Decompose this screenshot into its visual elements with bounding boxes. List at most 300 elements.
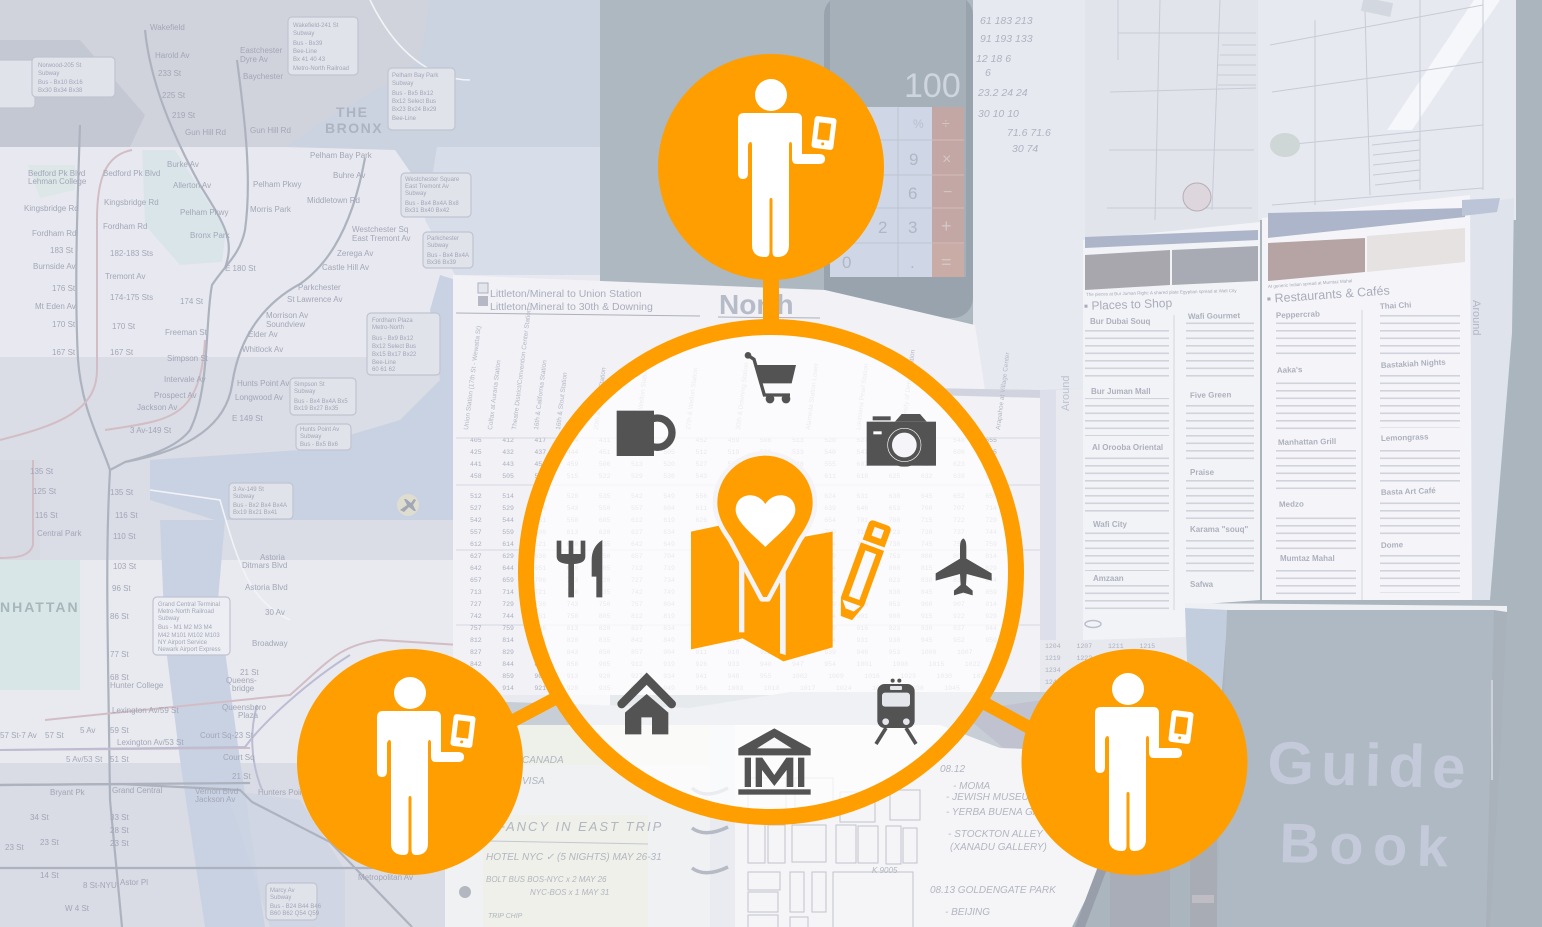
map labels: Bronx: Burnside Av <box>33 262 76 271</box>
icon: fork and knife <box>557 540 602 597</box>
icon: pencil <box>835 519 893 622</box>
panel: open guide book pages: ▪ Restaurants & Cafés <box>1266 283 1390 306</box>
station info cards: Metro-North Railroad <box>293 66 349 72</box>
panel: travel notebook: HOTEL NYC ✓ (5 NIGHTS) MAY 26-31 <box>486 852 662 863</box>
station info cards: Bx23 Bx24 Bx29 <box>392 107 437 113</box>
panel: handwritten sums sheet <box>973 0 1085 390</box>
panel: open guide book pages: Peppercrab <box>1276 309 1320 320</box>
panel: travel notebook: FANCY IN EAST TRIP <box>497 819 663 834</box>
map labels: Bronx: Elder Av <box>248 330 278 339</box>
panel: subway map <box>0 0 610 927</box>
panel: travel notebook: NYC-BOS x 1 MAY 31 <box>530 888 609 897</box>
map labels: Manhattan and Queens: Broadway <box>252 639 288 648</box>
map labels: Manhattan and Queens: 5 Av/53 St <box>66 755 103 764</box>
icon: coffee mug <box>617 411 672 456</box>
panel: handwritten sums sheet: 23.2 24 24 <box>977 87 1028 99</box>
station info cards: Bee-Line <box>372 360 397 366</box>
map labels: Bronx: Buhre Av <box>333 171 365 180</box>
icon: house <box>622 679 672 734</box>
panel: phone area: 3 <box>908 218 917 237</box>
connector: right person to ring <box>984 703 1032 729</box>
map labels: Manhattan and Queens: 125 St <box>33 487 57 496</box>
station info cards: Fordham Plaza <box>372 318 413 324</box>
station info cards: Bus - M1 M2 M3 M4 <box>158 625 213 631</box>
map labels: Manhattan and Queens: 14 St <box>40 871 59 880</box>
map labels: Manhattan and Queens: Ditmars Blvd <box>242 561 287 570</box>
panel: timetable sheet: 1204 1207 1211 1215 <box>1045 643 1155 650</box>
panel: timetable sheet: 542 544 551 558 605 612 619 626 633 640 647 654 701 708 715 722 729 <box>470 517 997 524</box>
panel: timetable sheet: 727 729 736 743 750 757 804 811 818 825 832 839 846 853 900 907 914 <box>470 601 997 608</box>
map labels: Manhattan and Queens: Grand Central <box>112 786 162 795</box>
map labels: Bronx: Pelham Pkwy <box>253 180 301 189</box>
panel: open guide book pages: Around <box>1470 300 1482 335</box>
panel: timetable sheet: 557 559 606 613 620 627 634 641 648 655 702 709 716 723 730 737 744 <box>470 529 997 536</box>
panel: travel notebook: BOLT BUS BOS-NYC x 2 MAY 26 <box>486 875 607 884</box>
station info cards: Bus - Bx4 Bx4A <box>427 253 469 259</box>
map labels: Bronx: Dyre Av <box>240 55 268 64</box>
panel: travel notebook <box>445 692 1185 927</box>
map labels: Manhattan and Queens: 57 St-7 Av <box>0 731 37 740</box>
station info cards: Bx12 Select Bus <box>392 99 436 105</box>
panel: timetable sheet: Littleton/Mineral to Union Station <box>490 288 642 300</box>
panel: phone area: . <box>910 253 915 272</box>
map labels: Bronx: Tremont Av <box>105 272 145 281</box>
connector: left person to ring <box>505 698 556 725</box>
map labels: Bronx: Intervale Av <box>164 375 206 384</box>
panel: open guide book pages: Basta Art Café <box>1381 486 1436 497</box>
map labels: Manhattan and Queens: 33 St <box>110 813 129 822</box>
panel: guide book cover <box>1110 603 1507 927</box>
station info cards: 60 61 62 <box>372 367 396 373</box>
station info cards: Bx19 Bx21 Bx41 <box>233 510 278 516</box>
panel: timetable sheet: 1249 1252 1256 1300 <box>1045 679 1155 686</box>
panel: timetable sheet: 642 644 651 658 705 712 719 726 733 740 747 754 801 808 815 822 829 <box>470 565 997 572</box>
map labels: Bronx: Bedford Pk Blvd <box>103 169 160 178</box>
panel: timetable sheet: 1234 1237 1241 1245 <box>1045 667 1155 674</box>
panel: phone area: + <box>941 216 952 236</box>
central icon set <box>557 352 992 795</box>
map labels: Bronx: 176 St <box>52 284 76 293</box>
map labels: Manhattan and Queens: Bryant Pk <box>50 788 86 797</box>
panel: timetable sheet: 441 443 452 459 506 513 520 527 534 541 548 555 602 609 616 623 630 <box>470 461 997 468</box>
map labels: Bronx: Morris Park <box>250 205 292 214</box>
map labels: Bronx: Kingsbridge Rd <box>24 204 79 213</box>
panel: phone area: × <box>942 151 951 168</box>
station info cards: Bx36 Bx39 <box>427 260 457 266</box>
map labels: Bronx: 167 St <box>110 348 134 357</box>
panel: timetable sheet: Arapahoe at Village Center <box>995 351 1012 430</box>
map labels: Bronx: Whitlock Av <box>242 345 283 354</box>
panel: hand-drawn calendar pages <box>1085 0 1516 240</box>
map labels: Bronx: Fordham Rd <box>103 222 147 231</box>
panel: open guide book pages: Bastakiah Nights <box>1381 358 1446 370</box>
panel: handwritten sums sheet: 30 10 10 <box>978 108 1019 120</box>
map heading: Manhattan: NHATTAN <box>0 599 80 615</box>
map labels: Manhattan and Queens: 30 Av <box>265 608 285 617</box>
panel: open guide book pages: Safwa <box>1190 580 1214 589</box>
icon: folded map with heart pin <box>691 453 833 661</box>
panel: handwritten sums sheet: 71.6 71.6 <box>1007 127 1051 139</box>
panel: open guide book pages: Bur Juman Mall <box>1091 387 1151 396</box>
circle: left traveller <box>297 649 523 875</box>
panel: timetable sheet: 742 744 751 758 805 812 819 826 833 840 847 854 901 908 915 922 929 <box>470 613 997 620</box>
station info cards: Subway <box>405 191 426 197</box>
main ring <box>526 327 1016 817</box>
map labels: Bronx: 219 St <box>172 111 196 120</box>
station info cards: Bus - Bx9 Bx12 <box>372 336 414 342</box>
panel: timetable sheet: Union Station (17th St - Wewatta St) <box>463 326 483 430</box>
station info cards: Bus - Bx2 Bx4 Bx4A <box>233 503 287 509</box>
map labels: Bronx: 174 St <box>180 297 204 306</box>
panel: travel notebook: - BEIJING <box>945 907 990 918</box>
station info cards: Bx 41 40 43 <box>293 57 326 63</box>
icon: airport marker <box>397 494 419 516</box>
panel: open guide book pages: Bur Dubai Souq <box>1090 317 1151 326</box>
panel: timetable sheet: Littleton/Mineral to 30th & Downing <box>490 301 653 313</box>
panel: handwritten sums sheet: 30 74 <box>1012 143 1038 155</box>
map labels: Bronx: 182-183 Sts <box>110 249 153 258</box>
panel: timetable sheet: 512 514 521 528 535 542 549 556 603 610 617 624 631 638 645 652 659 <box>470 493 997 500</box>
map labels: Bronx: Zerega Av <box>337 249 373 258</box>
map labels: Bronx: Hunts Point Av <box>237 379 289 388</box>
map labels: Bronx: Longwood Av <box>235 393 283 402</box>
station info cards: Grand Central Terminal <box>158 602 220 608</box>
station info cards: Bee-Line <box>293 49 318 55</box>
panel: phone area <box>600 0 985 320</box>
map labels: Bronx: Gun Hill Rd <box>250 126 291 135</box>
panel: open guide book pages: Wafi Gourmet <box>1188 311 1241 321</box>
panel: open guide book pages: Praise <box>1190 468 1215 477</box>
panel: timetable sheet: Colfax at Auraria Station <box>487 359 503 430</box>
panel: timetable sheet: 612 614 621 628 635 642 649 656 703 710 717 724 731 738 745 752 759 <box>470 541 997 548</box>
map labels: Bronx: Gun Hill Rd <box>185 128 226 137</box>
station info cards: Marcy Av <box>270 888 295 894</box>
map labels: Manhattan and Queens: Lexington Av/59 St <box>112 706 179 715</box>
station info cards: Bus - Bx4 Bx4A Bx5 <box>294 399 348 405</box>
panel: timetable sheet: 657 659 706 713 720 727 734 741 748 755 802 809 816 823 830 837 844 <box>470 577 997 584</box>
map labels: Manhattan and Queens: 68 St <box>110 673 129 682</box>
circle: right traveller <box>1022 649 1248 875</box>
map labels: Manhattan and Queens: Hunter College <box>110 681 164 690</box>
map labels: Bronx: St Lawrence Av <box>287 295 342 304</box>
panel: timetable sheet: 627 629 636 643 650 657 704 711 718 725 732 739 746 753 800 807 814 <box>470 553 997 560</box>
panel: travel notebook: (XANADU GALLERY) <box>950 842 1047 853</box>
panel: open guide book pages: Manhattan Grill <box>1278 437 1336 447</box>
station info cards: Bus - B24 B44 B46 <box>270 904 322 910</box>
icon: shopping cart <box>745 352 796 403</box>
map labels: Bronx: 3 Av-149 St <box>130 426 172 435</box>
panel: open guide book pages <box>1040 195 1514 640</box>
map labels: Manhattan and Queens: 21 St <box>232 772 251 781</box>
icon: person holding phone <box>1095 673 1194 851</box>
map labels: Bronx: Lehman College <box>28 177 87 186</box>
station info cards: Subway <box>300 434 321 440</box>
panel: open guide book pages: Al Orooba Oriental <box>1092 443 1163 452</box>
station info cards: Bx30 Bx34 Bx38 <box>38 88 83 94</box>
panel: timetable sheet: North <box>719 289 794 320</box>
station info cards: Bx12 Select Bus <box>372 344 416 350</box>
map labels: Bronx: Burke Av <box>167 160 199 169</box>
map labels: Manhattan and Queens: Lexington Av/53 St <box>117 738 184 747</box>
panel: timetable sheet: 812 814 821 828 835 842 849 856 903 910 917 924 931 938 945 952 959 <box>470 637 997 644</box>
map labels: Manhattan and Queens: Queens- <box>226 676 257 685</box>
panel: timetable sheet: 842 844 851 858 905 912 919 926 933 940 947 954 1001 1008 1015 1022 <box>470 661 980 668</box>
station info cards: Subway <box>233 494 254 500</box>
icon: person holding phone <box>738 79 837 257</box>
panel: open guide book pages: Around <box>1060 376 1072 411</box>
panel: timetable sheet: 30th & Downing Station <box>735 362 750 430</box>
panel: timetable sheet: 757 759 806 813 820 827 834 841 848 855 902 909 916 923 930 937 944 <box>470 625 997 632</box>
map labels: Manhattan and Queens: Central Park <box>37 529 82 538</box>
map labels: Manhattan and Queens: Astor Pl <box>120 878 148 887</box>
panel: timetable sheet: 527 529 536 543 550 557 604 611 618 625 632 639 646 653 700 707 714 <box>470 505 997 512</box>
panel: travel notebook: - STOCKTON ALLEY <box>948 829 1044 840</box>
map labels: Bronx: East Tremont Av <box>352 234 411 243</box>
panel: phone area: 100 <box>904 67 961 105</box>
panel: handwritten sums sheet: 61 183 213 <box>980 15 1033 27</box>
map labels: Bronx: Kingsbridge Rd <box>104 198 159 207</box>
map labels: Manhattan and Queens: 96 St <box>112 584 131 593</box>
panel: travel notebook: 08.12 <box>940 764 965 775</box>
map labels: Manhattan and Queens: 77 St <box>110 650 129 659</box>
panel: phone area: ÷ <box>942 115 950 131</box>
station info cards <box>0 17 473 920</box>
icon: airplane <box>936 538 992 595</box>
station info cards: B60 B62 Q54 Q59 <box>270 911 320 917</box>
panel: open guide book pages: Medzo <box>1279 500 1304 509</box>
station info cards: Bus - Bx39 <box>293 41 323 47</box>
panel: open guide book pages: Thai Chi <box>1380 300 1412 311</box>
panel: travel notebook: VISA <box>522 776 545 787</box>
map labels: Manhattan and Queens: 110 St <box>113 532 136 541</box>
map labels: Bronx: Pelham Bay Park <box>310 151 373 160</box>
icon: museum building <box>738 728 811 795</box>
station info cards: Subway <box>392 81 413 87</box>
map labels: Manhattan and Queens: 8 St-NYU <box>83 881 117 890</box>
panel: timetable sheet: 16th & Stout Station <box>555 372 569 430</box>
map labels: Bronx: Morrison Av <box>266 311 308 320</box>
station info cards: NY Airport Service <box>158 640 208 646</box>
panel: travel notebook: CANADA <box>522 755 564 766</box>
map labels: Bronx: Prospect Av <box>154 391 197 400</box>
panel: phone area: − <box>943 184 952 201</box>
map labels: Bronx: E 180 St <box>225 264 256 273</box>
icon: train <box>876 679 916 744</box>
panel: handwritten sums sheet: 91 193 133 <box>980 33 1033 45</box>
panel: travel notebook: K 9005 <box>872 866 898 875</box>
connector: top person to ring <box>763 270 779 330</box>
panel: phone area: 2 <box>878 218 887 237</box>
panel: handwritten sums sheet: 6 <box>985 67 991 79</box>
panel: travel notebook: - YERBA BUENA GARDENS <box>946 807 1075 818</box>
station info cards: 3 Av-149 St <box>233 487 264 493</box>
panel: timetable sheet: 25th & Welton Station <box>635 367 650 430</box>
station info cards: Bx19 Bx27 Bx35 <box>294 406 339 412</box>
panel: phone area: 0 <box>842 253 851 272</box>
map labels: Manhattan and Queens: Plaza <box>238 711 259 720</box>
map labels: Manhattan and Queens: 23 St <box>5 843 24 852</box>
panel: timetable sheet: 713 714 721 728 735 742 749 756 803 810 817 824 831 838 845 852 859 <box>470 589 997 596</box>
map labels: Manhattan and Queens: Vernon Blvd <box>195 787 238 796</box>
map labels: Manhattan and Queens: 34 St <box>30 813 49 822</box>
circle: top traveller <box>658 54 884 280</box>
map labels: Bronx: Castle Hill Av <box>322 263 369 272</box>
map labels: Manhattan and Queens: 51 St <box>110 755 129 764</box>
map labels: Bronx: Westchester Sq <box>352 225 408 234</box>
map labels: Bronx: Fordham Rd <box>32 229 76 238</box>
panel: phone area: 6 <box>908 184 917 203</box>
panel: open guide book pages: Lemongrass <box>1381 432 1429 443</box>
panel: open guide book pages: Amzaan <box>1093 574 1124 583</box>
station info cards: Metro-North Railroad <box>158 609 214 615</box>
panel: timetable sheet: 458 505 508 515 522 529 536 543 550 557 604 611 618 625 632 639 646 <box>470 473 997 480</box>
station info cards: Bus - Bx5 Bx12 <box>392 91 434 97</box>
map labels: Bronx: 170 St <box>52 320 76 329</box>
station info cards: Westchester Square <box>405 177 460 183</box>
map labels: Manhattan and Queens: 135 St <box>110 488 134 497</box>
panel: timetable sheet: Theatre District/Convention Center Station <box>511 308 533 430</box>
map labels: Manhattan and Queens: Hunters Point <box>258 788 307 797</box>
panel: timetable sheet: 827 829 836 843 850 857 904 911 918 925 932 939 946 953 1000 1007 <box>470 649 973 656</box>
map labels: Bronx: E 149 St <box>232 414 263 423</box>
panel: open guide book pages: Dome <box>1381 540 1404 550</box>
station info cards: Bus - Bx10 Bx16 <box>38 80 83 86</box>
map labels: Bronx: 183 St <box>50 246 74 255</box>
panel: timetable sheet <box>453 275 1190 695</box>
station info cards: Subway <box>38 71 59 77</box>
station info cards: Newark Airport Express <box>158 647 221 653</box>
map labels: Bronx: 170 St <box>112 322 136 331</box>
station info cards: Subway <box>294 389 315 395</box>
panel: timetable sheet: University of Denver Station <box>900 349 917 430</box>
station info cards: Subway <box>427 243 448 249</box>
map labels: Bronx: 167 St <box>52 348 76 357</box>
map labels: Bronx: Bronx Park <box>190 231 231 240</box>
map labels: Manhattan and Queens: 57 St <box>45 731 64 740</box>
map labels: Manhattan and Queens: 5 Av <box>80 726 95 735</box>
map labels: Manhattan and Queens: 21 St <box>240 668 259 677</box>
station info cards: Bus - Bx4 Bx4A Bx8 <box>405 201 459 207</box>
panel: timetable sheet: 1219 1222 1226 1230 <box>1045 655 1155 662</box>
map labels: Manhattan and Queens: 59 St <box>110 726 129 735</box>
icon: camera <box>867 414 936 466</box>
map heading: The Bronx: BRONX <box>325 120 383 136</box>
map heading: The Bronx <box>325 104 383 136</box>
map labels: Bronx: Eastchester <box>240 46 283 55</box>
station info cards: Pelham Bay Park <box>392 73 439 79</box>
station info cards: Simpson St <box>294 382 325 388</box>
map labels: Bronx: Mt Eden Av <box>35 302 76 311</box>
panel: open guide book pages: Mumtaz Mahal <box>1280 554 1335 563</box>
panel: open guide book pages: Five Green <box>1190 390 1231 400</box>
station info cards: Subway <box>270 895 291 901</box>
panel: open guide book pages: Aaka's <box>1277 365 1303 375</box>
station info cards: Bus - Bx5 Bx6 <box>300 442 339 448</box>
map labels: Manhattan and Queens: 116 St <box>35 511 58 520</box>
map labels: Bronx: Bedford Pk Blvd <box>28 169 85 178</box>
map labels: Bronx: Baychester <box>243 72 283 81</box>
map labels: Manhattan and Queens: Court Sq-23 St <box>200 731 254 740</box>
panel: travel notebook: - MOMA <box>953 781 991 792</box>
panel: open guide book pages: At generic Indian spread at Mumtaz Mahal <box>1268 278 1352 289</box>
panel: phone area: = <box>941 252 952 272</box>
station info cards: Bx15 Bx17 Bx22 <box>372 352 417 358</box>
station info cards: Hunts Point Av <box>300 427 339 433</box>
station info cards: Bee-Line <box>392 116 417 122</box>
panel: open guide book pages: Wafi City <box>1093 520 1127 529</box>
map labels: Manhattan and Queens: Jackson Av <box>195 795 235 804</box>
panel: open guide book pages: Karama "souq" <box>1190 525 1248 534</box>
map labels: Bronx: Parkchester <box>298 283 341 292</box>
map labels: Bronx <box>24 23 411 435</box>
panel: timetable sheet: Louisiana Pearl Station <box>855 363 870 430</box>
map labels: Manhattan and Queens: 135 St <box>30 467 54 476</box>
map labels: Manhattan and Queens: W 4 St <box>65 904 90 913</box>
map labels: Manhattan and Queens: bridge <box>232 684 255 693</box>
panel: timetable sheet: 405 412 417 424 431 438 445 452 459 506 513 520 527 534 541 548 555 <box>470 437 997 444</box>
panel: guide book cover: Book <box>1279 811 1458 879</box>
panel: timetable sheet: 425 432 437 444 451 458 505 512 519 526 533 540 547 554 601 608 615 <box>470 449 997 456</box>
panel: timetable sheet: 27th & Welton Station <box>685 367 700 430</box>
station info cards: Subway <box>158 616 179 622</box>
map labels: Bronx: Allerton Av <box>173 181 211 190</box>
panel: travel notebook: 08.13 GOLDENGATE PARK <box>930 885 1057 896</box>
station info cards: East Tremont Av <box>405 184 449 190</box>
map labels: Bronx: Simpson St <box>167 354 209 363</box>
map labels: Manhattan and Queens: 23 St <box>110 839 129 848</box>
panel: open guide book pages: ▪ Places to Shop <box>1084 296 1173 313</box>
map labels: Manhattan and Queens: Astoria <box>260 553 285 562</box>
map labels: Manhattan and Queens: 28 St <box>110 826 129 835</box>
panel: handwritten sums sheet: 12 18 6 <box>976 53 1011 65</box>
panel: timetable sheet: 912 914 921 928 935 942 949 956 1003 1010 1017 1024 1031 1038 1045 <box>470 685 960 692</box>
map labels: Bronx: Jackson Av <box>137 403 177 412</box>
map labels: Bronx: 233 St <box>158 69 182 78</box>
map labels: Bronx: Freeman St <box>165 328 208 337</box>
panel: timetable sheet: 857 859 906 913 920 927 934 941 948 955 1002 1009 1016 1023 1030 1037 <box>470 673 988 680</box>
map labels: Bronx: 174-175 Sts <box>110 293 153 302</box>
panel: phone area: 9 <box>909 150 918 169</box>
panel: open guide book pages: The pieces at Bur Juman Right: A shared plate Egyptian spread at Wafi City <box>1086 288 1237 297</box>
map labels: Bronx: Pelham Pkwy <box>180 208 228 217</box>
map labels: Manhattan and Queens: Astoria Blvd <box>245 583 288 592</box>
panel: travel notebook: - JEWISH MUSEUM <box>946 792 1038 803</box>
panel: timetable sheet: 16th & California Station <box>533 359 549 430</box>
map labels: Manhattan and Queens: Court Sq <box>223 753 255 762</box>
station info cards: Norwood-205 St <box>38 63 82 69</box>
panel: timetable sheet: 20th & Welton Station <box>593 367 608 430</box>
station info cards: Metro-North <box>372 325 404 331</box>
station info cards: Parkchester <box>427 236 459 242</box>
station info cards: M42 M101 M102 M103 <box>158 633 220 639</box>
panel: guide book cover: Guide <box>1267 729 1473 801</box>
station info cards: Wakefield-241 St <box>293 23 339 29</box>
map labels: Manhattan and Queens: Metropolitan Av <box>358 873 413 882</box>
panel: phone area: % <box>913 117 924 131</box>
map labels: Bronx: 225 St <box>162 91 186 100</box>
map labels: Manhattan and Queens: 23 St <box>40 838 59 847</box>
map labels: Manhattan and Queens: 86 St <box>110 612 129 621</box>
station info cards: Subway <box>293 31 314 37</box>
map heading: The Bronx: THE <box>336 104 368 120</box>
panel: timetable sheet: Alameda Station Lower <box>805 362 820 430</box>
map labels: Bronx: Wakefield <box>150 23 185 32</box>
station info cards: Bx31 Bx40 Bx42 <box>405 208 450 214</box>
map labels: Bronx: Middletown Rd <box>307 196 360 205</box>
icon: person holding phone <box>377 677 476 855</box>
map labels: Manhattan and Queens: 103 St <box>113 562 137 571</box>
panel: travel notebook: TRIP CHIP <box>488 913 523 920</box>
